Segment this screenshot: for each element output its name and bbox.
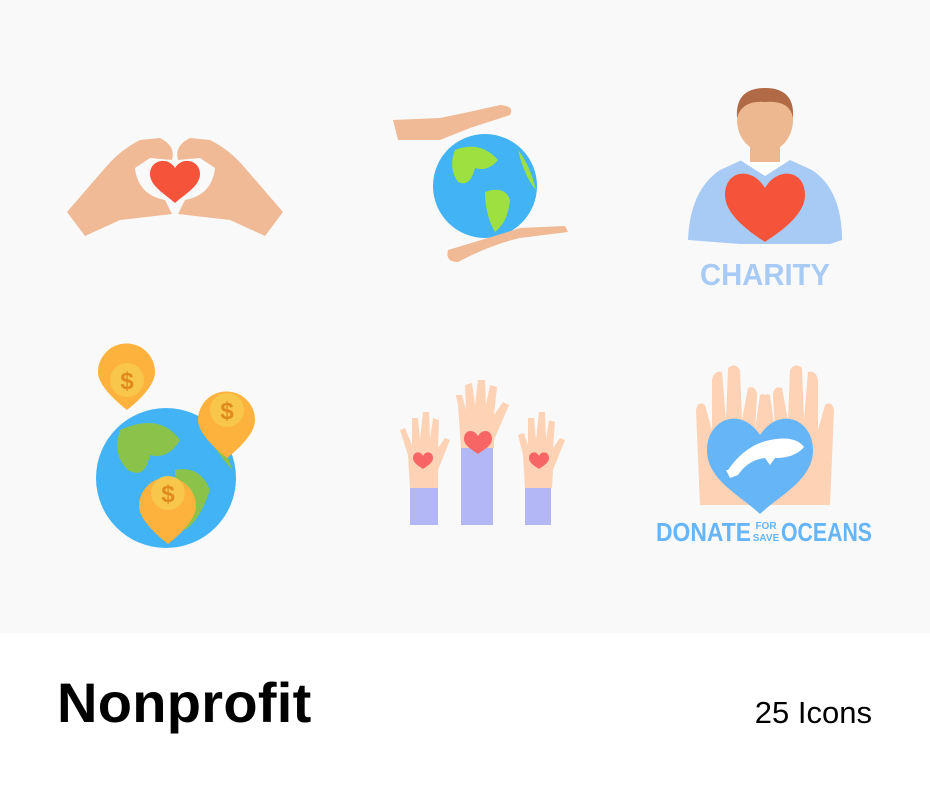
text: DONATE FOR SAVE OCEANS: SAVE bbox=[753, 533, 780, 544]
text: CHARITY: CHARITY bbox=[700, 257, 830, 292]
icon: globe in hands bbox=[393, 105, 568, 262]
icon: charity person bbox=[688, 88, 842, 292]
title: Nonprofit bbox=[57, 671, 312, 734]
icon: globe with money pins: $ bbox=[120, 368, 134, 395]
text: DONATE FOR SAVE OCEANS: FOR bbox=[755, 521, 777, 532]
icon: raised hands bbox=[400, 380, 565, 525]
icon: heart hands bbox=[67, 138, 283, 236]
icon: globe with money pins: $ bbox=[220, 398, 234, 425]
text: DONATE FOR SAVE OCEANS bbox=[656, 517, 872, 547]
icon: globe with money pins: $ bbox=[161, 481, 175, 508]
icon: donate for save oceans bbox=[656, 365, 872, 547]
icon count: 25 Icons bbox=[755, 695, 872, 730]
text: DONATE FOR SAVE OCEANS: OCEANS bbox=[781, 517, 872, 547]
icon: globe with money pins bbox=[96, 344, 255, 548]
text: DONATE FOR SAVE OCEANS: DONATE bbox=[656, 517, 751, 547]
